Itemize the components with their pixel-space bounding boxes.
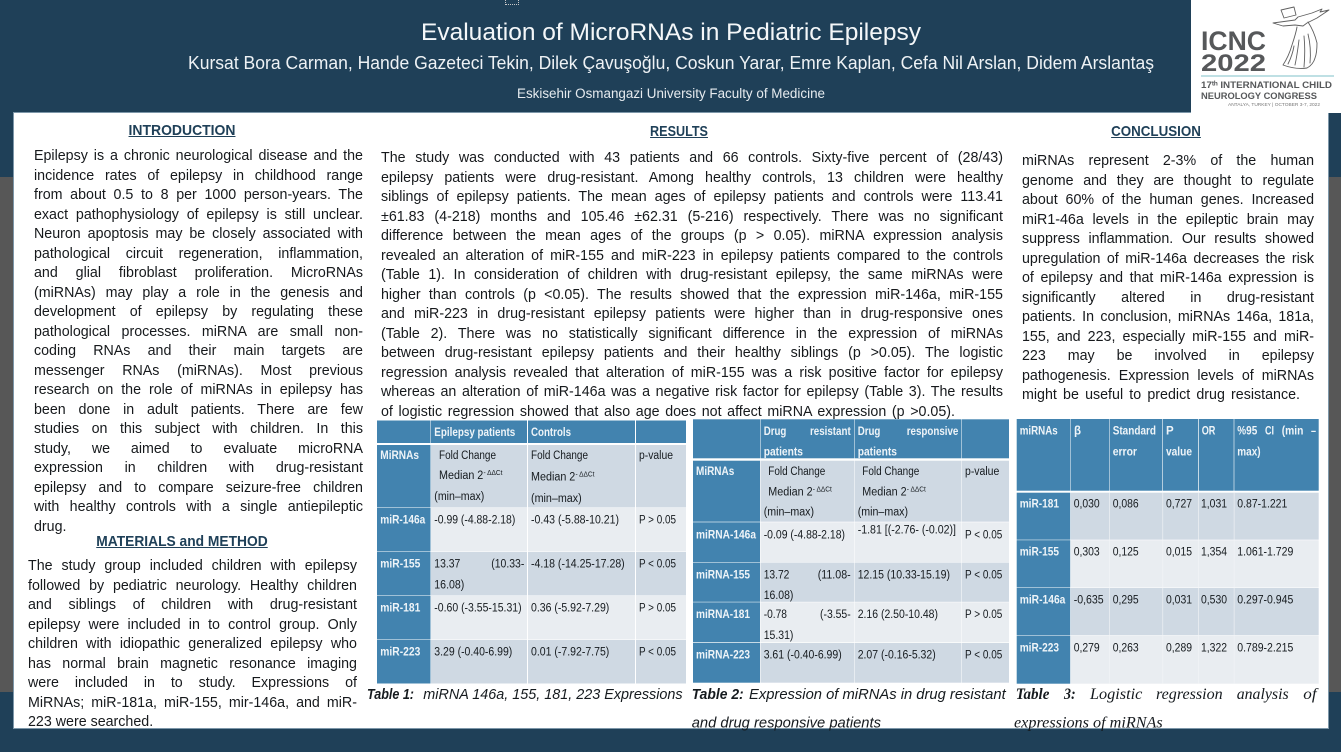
table 1: miRNA expressions: p-value — [639, 450, 673, 462]
table 3: logistic regression: 0.297-0.945 — [1237, 594, 1293, 606]
icon: whirling dervish — [1273, 7, 1329, 68]
table 3: logistic regression: error — [1113, 446, 1137, 458]
text block: introduction: drug. — [34, 518, 66, 534]
header block — [188, 19, 1154, 101]
text block: conclusion: suppress inflammation. Our results showed — [1022, 230, 1314, 247]
table 1: miRNA expressions: (10.33- — [491, 558, 524, 570]
text block: introduction: incidence rates of epilepsy in childhood range — [34, 166, 363, 184]
caption: table 1: miRNA 146a, 155, 181, 223 Expressions — [423, 686, 683, 703]
text block: introduction: with healthy controls with a single antiepileptic — [34, 498, 363, 515]
table 3: logistic regression: 0,086 — [1113, 498, 1139, 510]
table 2: drug resistant vs responsive: 12.15 (10.33-15.19) — [858, 569, 950, 581]
text block: conclusion: might be useful to predict drug resistance. — [1022, 386, 1300, 403]
table 3: logistic regression: 0,303 — [1074, 547, 1100, 559]
text block: results: The study was conducted with 43 patients and 66 controls. Sixty-five percent of (28/43) — [381, 149, 1003, 166]
table 2: drug resistant vs responsive: resistant — [810, 426, 851, 438]
table 1: miRNA expressions: P > 0.05 — [639, 602, 676, 614]
conference logo: ICNC — [1201, 26, 1266, 56]
text block: results: between drug-resistant epilepsy patients and their healthy siblings (p >0.05). The logistic — [381, 344, 1003, 361]
conference logo: ANTALYA, TURKEY | OCTOBER 3-7, 2022 — [1228, 102, 1321, 107]
table 1: miRNA expressions: 0.01 (-7.92-7.75) — [531, 646, 609, 658]
text block: introduction: study, we aimed to evaluate microRNA — [34, 440, 363, 456]
table 2: drug resistant vs responsive: -1.81 [(-2.76- (-0.02)] — [858, 524, 956, 536]
table 2: drug resistant vs responsive: patients — [858, 447, 897, 459]
caption: table 3: Logistic — [1089, 686, 1142, 703]
text block: results: ±61.83 (4-218) months and 105.46 ±62.31 (5-216) respectively. There was no significant — [381, 208, 1003, 224]
table 3: logistic regression: miR-181 — [1020, 498, 1060, 510]
text block: materials and method: followed by pediatric neurology. Healthy children — [28, 576, 357, 594]
table 3: logistic regression: (min — [1282, 425, 1303, 437]
table 2: drug resistant vs responsive: p-value — [965, 466, 999, 478]
table 3: logistic regression: 1.061-1.729 — [1237, 547, 1293, 559]
caption: table 1: Table 1: — [367, 686, 414, 703]
text block: materials and method: were included in to study. Expressions of — [28, 674, 357, 691]
table 1: miRNA expressions: MiRNAs — [380, 450, 419, 462]
text block: conclusion: pathogenesis. Expression levels of miRNAs — [1022, 366, 1314, 384]
table 3: logistic regression: Standard — [1113, 425, 1156, 437]
table 1: miRNA expressions: P < 0.05 — [639, 558, 676, 570]
heading: results: RESULTS — [650, 123, 708, 140]
text block: results — [381, 149, 1003, 420]
table 1: miRNA expressions: 0.36 (-5.92-7.29) — [531, 602, 609, 614]
text block: materials and method: and siblings of children with drug-resistant — [28, 596, 357, 613]
caption: table 2: Table 2: — [692, 686, 744, 703]
table 1: miRNA expressions: miR-155 — [380, 558, 421, 570]
text block: introduction: coding RNAs and their main targets are — [34, 342, 363, 359]
table 2: drug resistant vs responsive: Drug — [858, 426, 880, 438]
table 2: drug resistant vs responsive: 3.61 (-0.40-6.99) — [764, 650, 842, 662]
table 1: miRNA expressions: Median 2 — [439, 470, 483, 482]
table 1: miRNA expressions: 13.37 — [434, 558, 460, 570]
table 3: logistic regression: – — [1311, 425, 1316, 437]
text block: results: revealed an alteration of miR-155 and miR-223 in epilepsy patients compared to the controls — [381, 246, 1003, 264]
text block: materials and method: children with idiopathic generalized epilepsy who — [28, 635, 357, 652]
table 1: miRNA expressions: - ΔΔCt — [484, 470, 503, 477]
table 1: miRNA expressions: 3.29 (-0.40-6.99) — [434, 646, 512, 658]
table 1: miRNA expressions: -0.99 (-4.88-2.18) — [434, 514, 515, 526]
heading: materials and method: MATERIALS and METHOD — [96, 533, 268, 550]
caption: table 3: regression — [1156, 686, 1223, 703]
text block: introduction: Epilepsy is a chronic neurological disease and the — [34, 147, 363, 164]
conference logo: NEUROLOGY CONGRESS — [1201, 91, 1317, 102]
table 2: drug resistant vs responsive: P < 0.05 — [965, 650, 1002, 662]
text block: introduction: epilepsy and to compare seizure-free children — [34, 478, 363, 496]
text block: introduction — [34, 147, 363, 534]
text block: introduction: messenger RNAs (miRNAs). Most previous — [34, 362, 363, 378]
table 2: drug resistant vs responsive: -0.09 (-4.88-2.18) — [764, 529, 845, 541]
conference logo: 17ᵗʰ INTERNATIONAL CHILD — [1201, 80, 1332, 91]
caption: table 2: Expression of miRNAs in drug resistant — [749, 686, 1007, 703]
table 3: logistic regression: 0,289 — [1166, 643, 1192, 655]
table 3: logistic regression: 1,354 — [1201, 547, 1228, 559]
caption: table 3: of — [1303, 686, 1319, 703]
text block: introduction: research on the role of miRNAs in epilepsy has — [34, 381, 363, 398]
text block: conclusion: miR1-46a levels in the epileptic brain may — [1022, 210, 1314, 228]
table 2: drug resistant vs responsive: MiRNAs — [696, 466, 734, 478]
text block: results: of logistic regression showed that also age does not affect miRNA expression (p >0.05). — [381, 402, 955, 420]
text block: materials and method: The study group included children with epilepsy — [28, 557, 357, 574]
text block: materials and method: MiRNAs; miR-181a, miR-155, mir-146a, and miR- — [28, 694, 357, 710]
table 3: logistic regression: 0,263 — [1113, 643, 1139, 655]
table 2: drug resistant vs responsive: P < 0.05 — [965, 529, 1002, 541]
table 1: miRNA expressions: miR-223 — [380, 646, 420, 658]
logo background — [1191, 0, 1341, 113]
table 2: drug resistant vs responsive: miRNA-223 — [696, 650, 750, 662]
table 2: drug resistant vs responsive: - ΔΔCt — [907, 486, 926, 493]
text block: introduction: from about 0.5 to 8 per 1000 person-years. The — [34, 186, 363, 203]
table 3: logistic regression: -0,635 — [1074, 594, 1104, 606]
table 1: miRNA expressions: - ΔΔCt — [576, 472, 595, 479]
table 3: logistic regression: CI — [1265, 425, 1274, 437]
table 1: miRNA expressions: Median 2 — [531, 472, 575, 484]
text block: conclusion: of epilepsy and that miR-146a expression is — [1022, 269, 1314, 286]
table 3: logistic regression: 0,727 — [1166, 498, 1192, 510]
table 3: logistic regression: 1,031 — [1201, 498, 1227, 510]
table 2: drug resistant vs responsive: 15.31) — [764, 630, 794, 642]
table 3: logistic regression: miR-155 — [1020, 547, 1060, 559]
caption: table 3: expressions of miRNAs — [1014, 714, 1163, 732]
text block: results: whereas an alteration of miR-146a was a negative risk factor for epilepsy (Table 3). The results — [381, 383, 1003, 400]
table 3: logistic regression: value — [1166, 446, 1192, 458]
caption: table 2 — [692, 686, 1007, 732]
table 2: drug resistant vs responsive: (min–max) — [764, 506, 814, 518]
table 2: drug resistant vs responsive: Median 2 — [768, 486, 813, 498]
text block: materials and method: has normal brain magnetic resonance imaging — [28, 654, 357, 672]
caption: table 3: analysis — [1237, 686, 1289, 703]
table 3: logistic regression — [1017, 419, 1319, 684]
text block: introduction: pathological processes. miRNA are small non- — [34, 322, 363, 340]
table 2: drug resistant vs responsive: miRNA-155 — [696, 569, 751, 581]
text block: introduction: and glial fibroblast proliferation. MicroRNAs — [34, 264, 363, 281]
table 1: miRNA expressions: miR-146a — [380, 514, 426, 526]
table 2: drug resistant vs responsive: Drug — [764, 426, 786, 438]
text block: conclusion: miRNAs represent 2-3% of the human — [1022, 152, 1314, 169]
table 3: logistic regression: miR-223 — [1020, 643, 1059, 655]
table 1: miRNA expressions: P > 0.05 — [639, 514, 676, 526]
table 3: logistic regression: 0,530 — [1201, 594, 1227, 606]
text block: introduction: (miRNAs) may play a role in the genesis and — [34, 284, 363, 300]
table 1: miRNA expressions: -4.18 (-14.25-17.28) — [531, 558, 625, 570]
table 2: drug resistant vs responsive: Fold Change — [862, 466, 919, 478]
table 3: logistic regression: miRNAs — [1020, 425, 1058, 437]
table 1: miRNA expressions: (min–max) — [531, 493, 582, 505]
affiliation: Eskisehir Osmangazi University Faculty of Medicine — [517, 86, 825, 101]
text block: conclusion: genome and they are thought to regulate — [1022, 172, 1314, 188]
caption: table 2: and drug responsive patients — [692, 714, 881, 732]
table 3: logistic regression: 0,030 — [1074, 498, 1100, 510]
table 3: logistic regression: β — [1074, 425, 1081, 437]
text block: introduction: studies on this subject with children. In this — [34, 420, 363, 437]
text block: results: difference between the mean ages of the groups (p > 0.05). miRNA expression analysis — [381, 227, 1003, 244]
table 1: miRNA expressions: -0.43 (-5.88-10.21) — [531, 514, 619, 526]
table 1: miRNA expressions: 16.08) — [434, 579, 464, 591]
table 3: logistic regression: 0.789-2.215 — [1237, 643, 1293, 655]
table 1: miRNA expressions: -0.60 (-3.55-15.31) — [434, 602, 522, 614]
table 3: logistic regression: 0,015 — [1166, 547, 1192, 559]
table 1: miRNA expressions: Epilepsy patients — [434, 427, 515, 439]
table 2: drug resistant vs responsive: (11.08- — [818, 569, 851, 581]
table 3: logistic regression: P — [1166, 425, 1174, 437]
table 2: drug resistant vs responsive: miRNA-181 — [696, 609, 751, 621]
text block: conclusion: patients. In conclusion, miRNAs 146a, 181a, — [1022, 308, 1314, 325]
text block: conclusion: 223 may be involved in epilepsy — [1022, 347, 1314, 364]
text block: introduction: expression in children with drug-resistant — [34, 459, 363, 476]
table 2: drug resistant vs responsive: Fold Change — [768, 466, 825, 478]
text block: results: (Table 1). In consideration of children with drug-resistant epilepsy, the same miRNAs were — [381, 266, 1003, 283]
text block: conclusion: about 60% of the human genes. Increased — [1022, 191, 1314, 208]
table 3: logistic regression: OR — [1202, 425, 1216, 437]
table 1: miRNA expressions: Fold Change — [531, 450, 588, 462]
heading: conclusion: CONCLUSION — [1111, 123, 1201, 140]
table 2: drug resistant vs responsive: 13.72 — [764, 569, 789, 581]
table 2: drug resistant vs responsive: patients — [764, 447, 803, 459]
conference logo: 2022 — [1201, 50, 1266, 77]
text block: materials and method: 223 were searched. — [28, 713, 153, 730]
table 3: logistic regression: 0,279 — [1074, 643, 1100, 655]
text block: results: siblings of epilepsy patients. The mean ages of epilepsy patients and controls were 113.41 — [381, 188, 1003, 205]
table 3: logistic regression: 1,322 — [1201, 643, 1227, 655]
heading: introduction: INTRODUCTION — [129, 122, 235, 139]
table 2: drug resistant vs responsive: miRNA-146a — [696, 529, 757, 541]
table 1: miRNA expressions: miR-181 — [380, 602, 421, 614]
table 1: miRNA expressions: Controls — [531, 427, 571, 439]
table 2: drug resistant vs responsive: - ΔΔCt — [813, 486, 832, 493]
table 3: logistic regression: 0,125 — [1113, 547, 1139, 559]
table 2: drug resistant vs responsive: P < 0.05 — [965, 569, 1002, 581]
text block: results: regression analysis revealed that alteration of miR-155 was a risk positive factor for epilepsy — [381, 364, 1003, 380]
text block: materials and method: epilepsy were included in to control group. Only — [28, 616, 357, 632]
table 3: logistic regression: 0.87-1.221 — [1237, 498, 1287, 510]
text block: conclusion: significantly altered in drug-resistant — [1022, 288, 1314, 306]
text block: results: and miR-223 in drug-resistant epilepsy patients were higher than in drug-responsive ones — [381, 305, 1003, 322]
caption: table 3: 3: — [1063, 686, 1076, 703]
text block: conclusion: 155, and 223, especially miR-155 and miR- — [1022, 328, 1314, 344]
authors: Kursat Bora Carman, Hande Gazeteci Tekin, Dilek Çavuşoğlu, Coskun Yarar, Emre Kaplan, Cefa Nil Arslan, Didem Arslantaş — [188, 53, 1154, 73]
title: Evaluation of MicroRNAs in Pediatric Epilepsy — [421, 19, 921, 46]
table 3: logistic regression: 0,295 — [1113, 594, 1139, 606]
caption: table 3: Table — [1016, 686, 1049, 703]
table 1: miRNA expressions: Fold Change — [439, 450, 496, 462]
table 3: logistic regression: miR-146a — [1020, 594, 1066, 606]
text block: results: epilepsy patients were drug-resistant. Among healthy controls, 13 children were healthy — [381, 168, 1003, 186]
table 2: drug resistant vs responsive — [693, 419, 1009, 683]
table 1: miRNA expressions — [377, 420, 686, 684]
table 2: drug resistant vs responsive: (min–max) — [858, 506, 908, 518]
text block: conclusion — [1022, 152, 1314, 403]
text block: introduction: been done in adult patients. There are few — [34, 400, 363, 418]
table 2: drug resistant vs responsive: (-3.55- — [820, 609, 851, 621]
text block: introduction: development of epilepsy by regulating these — [34, 303, 363, 320]
table 1: miRNA expressions: (min–max) — [434, 491, 484, 503]
text block: conclusion: upregulation of miR-146a decreases the risk — [1022, 250, 1314, 266]
table 2: drug resistant vs responsive: Median 2 — [862, 486, 907, 498]
table 2: drug resistant vs responsive: 2.16 (2.50-10.48) — [858, 609, 938, 621]
table 3: logistic regression: max) — [1237, 446, 1261, 458]
table 2: drug resistant vs responsive: -0.78 — [764, 609, 787, 621]
table 2: drug resistant vs responsive: 16.08) — [764, 590, 794, 602]
text block: introduction: Neuron apoptosis may be closely associated with — [34, 225, 363, 242]
table 2: drug resistant vs responsive: 2.07 (-0.16-5.32) — [858, 650, 936, 662]
text block: introduction: exact pathophysiology of epilepsy is still unclear. — [34, 206, 363, 222]
text block: results: (Table 2). There was no statistically significant difference in the expression of miRNAs — [381, 324, 1003, 342]
table 3: logistic regression: 0,031 — [1166, 594, 1192, 606]
table 3: logistic regression: %95 — [1237, 425, 1258, 437]
text block: materials and method — [28, 557, 357, 730]
table 2: drug resistant vs responsive: P > 0.05 — [965, 609, 1002, 621]
conference logo — [1201, 7, 1334, 107]
caption: table 3 — [1014, 686, 1319, 732]
table 2: drug resistant vs responsive: responsive — [907, 426, 958, 438]
text block: results: higher than controls (p <0.05). The results showed that the expression miR-146a, miR-155 — [381, 286, 1003, 302]
table 1: miRNA expressions: P < 0.05 — [639, 646, 676, 658]
text block: introduction: pathological circuit regeneration, inflammation, — [34, 244, 363, 262]
